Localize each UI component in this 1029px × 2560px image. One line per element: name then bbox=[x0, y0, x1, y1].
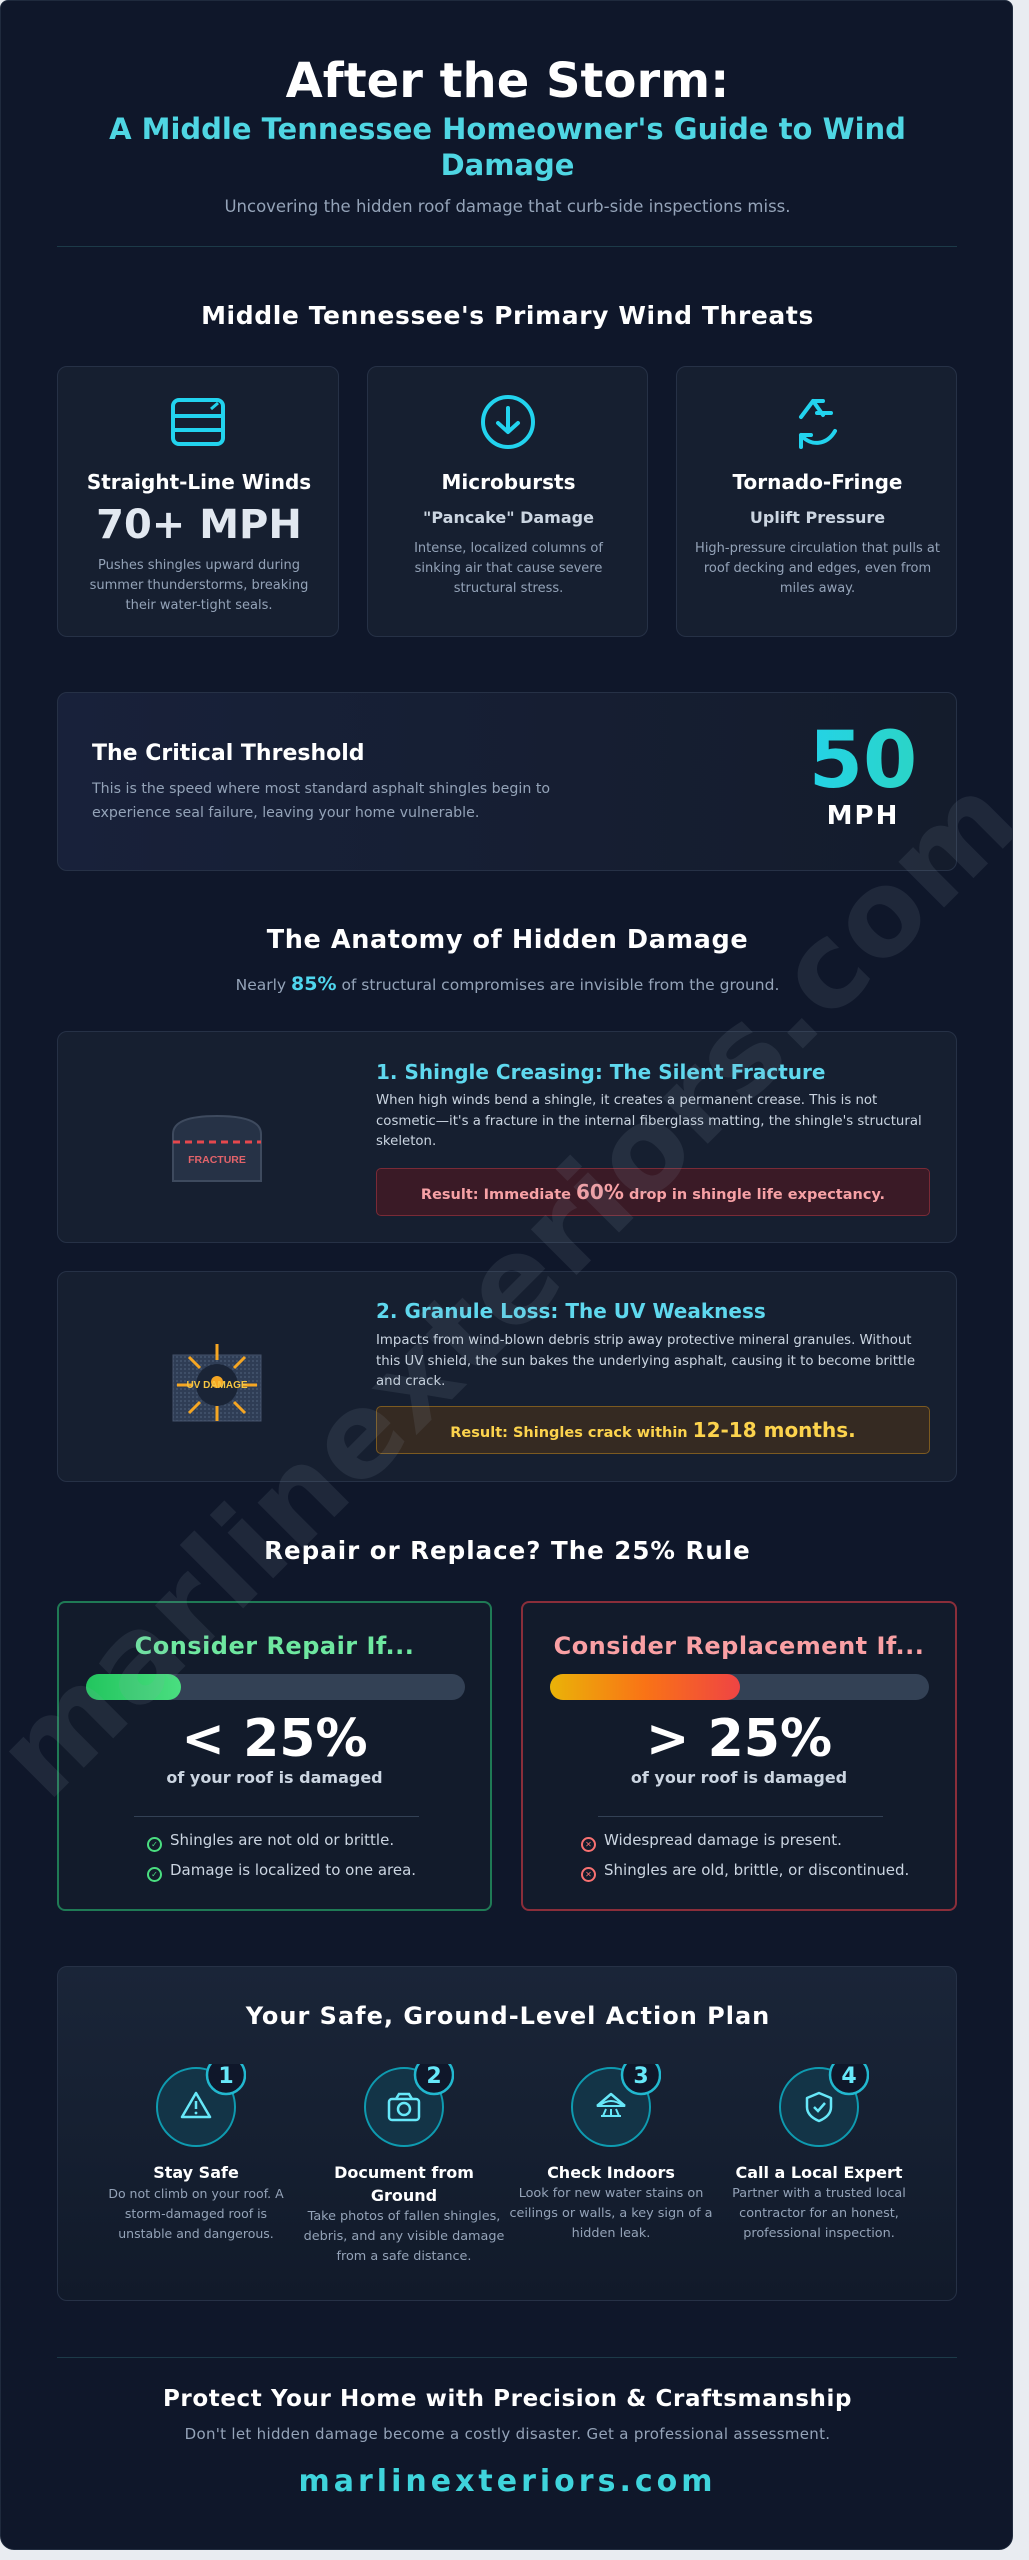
card title: Tornado-Fringe bbox=[733, 470, 902, 494]
threshold text: This is the speed where most standard asphalt shingles begin to experience seal failure, leaving your home vulnerable. bbox=[92, 781, 550, 821]
panel: shingle creasing bbox=[57, 1031, 957, 1243]
panel: replace bbox=[521, 1601, 957, 1911]
description: High-pressure circulation that pulls at roof decking and edges, even from miles away. bbox=[695, 541, 940, 596]
repair checklist: Damage is localized to one area. bbox=[170, 1861, 416, 1879]
repair checklist: ✓ bbox=[151, 1840, 158, 1849]
heading: wind threats: Middle Tennessee's Primary Wind Threats bbox=[201, 301, 814, 330]
step 2 bbox=[304, 2064, 504, 2264]
replace checklist bbox=[581, 1831, 909, 1882]
granule description: Impacts from wind-blown debris strip away protective mineral granules. Without this UV shield, the sun bakes the underlying asphalt, causing it to become brittle and crack. bbox=[376, 1333, 915, 1389]
icon: shield: 4 bbox=[841, 2064, 857, 2089]
replace checklist: ✕ bbox=[585, 1870, 592, 1879]
panel: granule loss bbox=[57, 1271, 957, 1482]
panel: tornado-fringe bbox=[676, 366, 957, 637]
icon: fracture shingle: FRACTURE bbox=[188, 1154, 246, 1166]
step 4 bbox=[732, 2064, 906, 2241]
step title: Stay Safe bbox=[153, 2163, 239, 2182]
step text: Look for new water stains on ceilings or walls, a key sign of a hidden leak. bbox=[509, 2186, 713, 2241]
icon: house leak bbox=[571, 2064, 661, 2147]
step text: Do not climb on your roof. A storm-damaged roof is unstable and dangerous. bbox=[108, 2186, 284, 2241]
result callout: Result: Immediate 60% drop in shingle life expectancy. bbox=[421, 1180, 885, 1204]
replace checklist: Shingles are old, brittle, or discontinued. bbox=[604, 1861, 909, 1879]
icon: down arrow circle bbox=[481, 395, 535, 449]
description: Pushes shingles upward during summer thunderstorms, breaking their water-tight seals. bbox=[90, 558, 308, 613]
panel: repair bbox=[57, 1601, 492, 1911]
repair checklist bbox=[147, 1831, 416, 1882]
replace checklist: ✕ bbox=[585, 1840, 592, 1849]
result callout: Result: Shingles crack within 12-18 months. bbox=[450, 1418, 856, 1442]
threshold heading: The Critical Threshold bbox=[92, 741, 365, 766]
card title: Straight-Line Winds bbox=[87, 470, 311, 494]
result callout bbox=[376, 1168, 930, 1216]
repair bar bbox=[86, 1674, 465, 1700]
icon: rotation bbox=[798, 398, 838, 449]
footer url: marlinexteriors.com bbox=[298, 2464, 716, 2499]
heading: anatomy: The Anatomy of Hidden Damage bbox=[267, 925, 748, 955]
icon: shingle bbox=[171, 398, 225, 446]
step title: Check Indoors bbox=[547, 2163, 675, 2182]
footer heading: Protect Your Home with Precision & Craftsmanship bbox=[163, 2386, 852, 2412]
stat: 50 MPH: MPH bbox=[827, 801, 899, 831]
repair stat label: of your roof is damaged bbox=[166, 1768, 383, 1787]
subtitle: A Middle Tennessee Homeowner's Guide to Wind Damage bbox=[109, 112, 906, 182]
creasing title: 1. Shingle Creasing: The Silent Fracture bbox=[376, 1060, 825, 1084]
icon: warning: 1 bbox=[218, 2064, 234, 2089]
result callout bbox=[376, 1406, 930, 1454]
description: Intense, localized columns of sinking air that cause severe structural stress. bbox=[414, 541, 603, 596]
icon: fracture shingle bbox=[172, 1115, 262, 1182]
panel: straight-line winds bbox=[57, 366, 339, 637]
title: After the Storm: bbox=[286, 53, 729, 109]
step text: Take photos of fallen shingles, debris, and any visible damage from a safe distance. bbox=[304, 2209, 504, 2264]
repair checklist: ✓ bbox=[151, 1870, 158, 1879]
replace checklist: Widespread damage is present. bbox=[604, 1831, 842, 1849]
replace stat label: of your roof is damaged bbox=[631, 1768, 847, 1787]
icon: UV damage bbox=[172, 1344, 262, 1422]
icon: shield bbox=[779, 2064, 869, 2147]
tagline: Uncovering the hidden roof damage that curb-side inspections miss. bbox=[224, 197, 791, 216]
panel: action plan bbox=[57, 1966, 957, 2301]
repair heading: Consider Repair If... bbox=[135, 1632, 414, 1660]
icon: house leak: 3 bbox=[633, 2064, 649, 2089]
step title: Document from Ground bbox=[334, 2163, 474, 2205]
footer text: Don't let hidden damage become a costly disaster. Get a professional assessment. bbox=[185, 2425, 830, 2443]
granule title: 2. Granule Loss: The UV Weakness bbox=[376, 1299, 766, 1323]
replace stat: > 25% bbox=[646, 1709, 832, 1769]
heading: repair or replace: Repair or Replace? The 25% Rule bbox=[264, 1536, 751, 1565]
repair checklist: Shingles are not old or brittle. bbox=[170, 1831, 394, 1849]
subtitle: "Pancake" Damage bbox=[423, 508, 594, 527]
panel: critical threshold bbox=[57, 692, 957, 871]
step 1 bbox=[108, 2064, 284, 2241]
icon: warning bbox=[156, 2064, 246, 2147]
step 3 bbox=[509, 2064, 713, 2241]
replace heading: Consider Replacement If... bbox=[554, 1632, 924, 1660]
action plan heading: Your Safe, Ground-Level Action Plan bbox=[246, 2002, 770, 2030]
icon: UV damage: UV DAMAGE bbox=[186, 1380, 248, 1391]
icon: camera: 2 bbox=[426, 2064, 442, 2089]
repair stat: < 25% bbox=[181, 1709, 368, 1769]
step text: Partner with a trusted local contractor for an honest, professional inspection. bbox=[732, 2186, 906, 2241]
subtitle: Uplift Pressure bbox=[750, 508, 885, 527]
creasing description: When high winds bend a shingle, it creates a permanent crease. This is not cosmetic—it's a fracture in the internal fiberglass matting, the shingle's structural skeleton. bbox=[376, 1093, 922, 1149]
card title: Microbursts bbox=[441, 470, 576, 494]
stat: 50 MPH: 50 bbox=[809, 716, 917, 806]
icon: camera bbox=[364, 2064, 454, 2147]
replace bar bbox=[550, 1674, 929, 1700]
step title: Call a Local Expert bbox=[735, 2163, 903, 2182]
stat 70+ MPH: 70+ MPH bbox=[96, 502, 302, 548]
anatomy subtext: Nearly 85% of structural compromises are invisible from the ground. bbox=[236, 973, 779, 995]
panel: microbursts bbox=[367, 366, 648, 637]
